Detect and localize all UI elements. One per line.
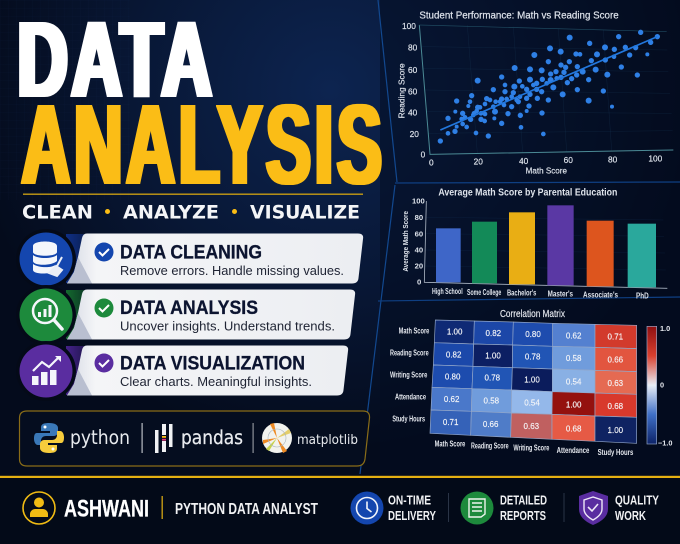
chart: scatter plot [397,11,673,176]
bar axis ticks: 100 [412,197,425,206]
icon: pandas [155,424,172,453]
icon: python [34,423,64,453]
heatmap values: 0.54 [524,399,540,408]
scatter axis titles [397,63,567,176]
scatter axis ticks [402,21,663,167]
heatmap column labels: Writing Score [513,444,550,453]
scatter axis ticks: 0 [429,157,434,167]
title: DATA: DATA [18,0,216,120]
badge: on-time delivery: DELIVERY [388,509,437,523]
heatmap values [443,328,624,435]
scatter axis ticks: 0 [421,149,426,159]
footer band [0,476,680,544]
heatmap values: 0.58 [566,354,582,363]
heatmap values: 0.68 [566,424,582,433]
scatter axis titles: Reading Score [397,63,407,118]
bar axis ticks: 60 [415,229,423,238]
colour scale: 1.0 [660,324,670,333]
title: ANALYSIS: ANALYSIS [22,82,386,208]
heading: DATA CLEANING [120,242,262,264]
bar labels: Some College [467,288,502,297]
heatmap row labels: Attendance [395,393,426,402]
heatmap values: 1.00 [566,401,582,410]
heatmap row labels: Writing Score [390,370,428,379]
label: python: python [70,426,130,449]
badge: detailed reports: REPORTS [500,509,546,523]
icon: user [23,492,55,524]
scatter title: Student Performance: Math vs Reading Score [419,11,619,22]
heatmap values: 1.00 [608,426,624,435]
bar labels: High School [432,287,463,296]
icon: clock [350,492,384,524]
panel: data analysis [16,285,355,345]
badge: on-time delivery: ON-TIME [388,494,431,508]
bar chart title: Average Math Score by Parental Education [438,188,617,199]
chart: correlation heatmap [390,309,672,457]
name: ASHWANI [64,496,149,522]
heatmap row labels [390,326,430,424]
check badge [94,242,114,262]
badge: detailed reports [460,492,547,524]
colour scale: −1.0 [658,439,672,448]
heatmap values: 0.63 [608,379,624,388]
description: Clear charts. Meaningful insights. [120,375,312,389]
heatmap column labels: Attendance [557,446,590,455]
scatter points [438,30,660,143]
heatmap column labels: Reading Score [471,441,509,450]
heatmap values: 0.71 [443,418,459,427]
heatmap row labels: Math Score [399,326,430,335]
scatter axis ticks: 100 [648,153,663,163]
description: Remove errors. Handle missing values. [120,264,344,278]
heatmap values: 0.68 [608,402,624,411]
heatmap values: 0.66 [608,356,624,365]
heatmap column labels [435,440,634,457]
heatmap values: 0.82 [486,329,502,338]
heatmap values: 0.54 [566,377,582,386]
scatter axis ticks: 40 [408,108,418,118]
heatmap column labels: Study Hours [598,448,634,457]
scatter axis ticks: 80 [608,154,618,164]
bar axis ticks: 80 [415,213,423,222]
heatmap values: 0.80 [525,330,541,339]
scatter axis ticks: 60 [408,65,418,75]
bar axis ticks: 40 [415,246,423,255]
role: PYTHON DATA ANALYST [175,501,318,518]
icon: shield [579,491,608,525]
scatter axis titles: Math Score [526,166,567,176]
heatmap values: 0.78 [525,353,541,362]
footer: author [23,492,318,524]
heatmap title: Correlation Matrix [500,309,565,320]
bar labels: Bachelor's [507,289,537,298]
scatter axis ticks: 20 [474,156,483,166]
bar labels: Associate's [583,291,618,300]
chart: bar chart [403,188,667,301]
colour scale [647,324,672,448]
bar labels [432,287,649,301]
scatter axis ticks: 100 [402,21,416,31]
icon: database with broom [16,229,76,289]
badge: quality work: QUALITY [615,494,660,508]
heatmap values: 0.63 [524,422,540,431]
trend line [440,37,657,130]
bar axis ticks [403,197,425,287]
badge: quality work: WORK [615,509,646,523]
bars [436,205,656,287]
panel: data visualization [16,341,348,401]
description: Uncover insights. Understand trends. [120,320,335,334]
heatmap values: 0.62 [566,331,582,340]
heading: DATA ANALYSIS [120,297,258,319]
label: matplotlib: matplotlib [297,433,358,448]
heatmap values: 0.78 [485,374,501,383]
heatmap values: 0.62 [444,395,460,404]
subtitle: clean analyze visualize: ANALYZE [123,202,219,224]
badge: on-time delivery [350,492,437,524]
subtitle: clean analyze visualize: CLEAN [22,202,93,224]
heatmap row labels: Reading Score [390,349,429,358]
heatmap row labels: Study Hours [392,415,425,424]
bar axes [424,201,667,288]
icon: rising chart [16,341,76,401]
bar axis ticks: 20 [415,262,423,271]
panel: data cleaning [16,229,363,289]
bar labels: PhD [636,292,649,301]
heatmap values: 1.00 [485,351,501,360]
icon: report [460,492,494,524]
badge: quality work [579,491,660,525]
scatter axis ticks: 80 [408,43,418,53]
heatmap values: 0.80 [445,372,461,381]
scatter axis ticks: 20 [410,129,419,139]
scatter axis ticks: 40 [519,156,529,166]
subtitle: clean analyze visualize: VISUALIZE [250,202,360,224]
heatmap values: 0.58 [484,397,500,406]
bar axis ticks: 0 [417,278,421,287]
badge: detailed reports: DETAILED [500,494,547,508]
icon: matplotlib [262,423,292,453]
label: pandas: pandas [181,428,243,449]
scatter axis ticks: 60 [564,155,573,165]
heading: DATA VISUALIZATION [120,352,305,374]
icon: magnifier with bars [16,285,76,345]
panel: tool logos [20,411,370,466]
subtitle: clean analyze visualize [22,194,363,224]
heatmap values: 0.82 [446,350,462,359]
heatmap column labels: Math Score [435,440,466,449]
heatmap values: 0.71 [608,333,624,342]
bar axis ticks: Average Math Score [403,211,410,272]
check badge [94,354,114,372]
heatmap cells [430,320,637,443]
bar labels: Master's [548,290,573,299]
scatter axis ticks: 60 [408,87,418,97]
heatmap values: 0.66 [483,420,499,429]
colour scale: 0 [660,381,664,390]
check badge [94,298,114,318]
heatmap values: 1.00 [524,376,540,385]
heatmap values: 1.00 [447,328,463,337]
